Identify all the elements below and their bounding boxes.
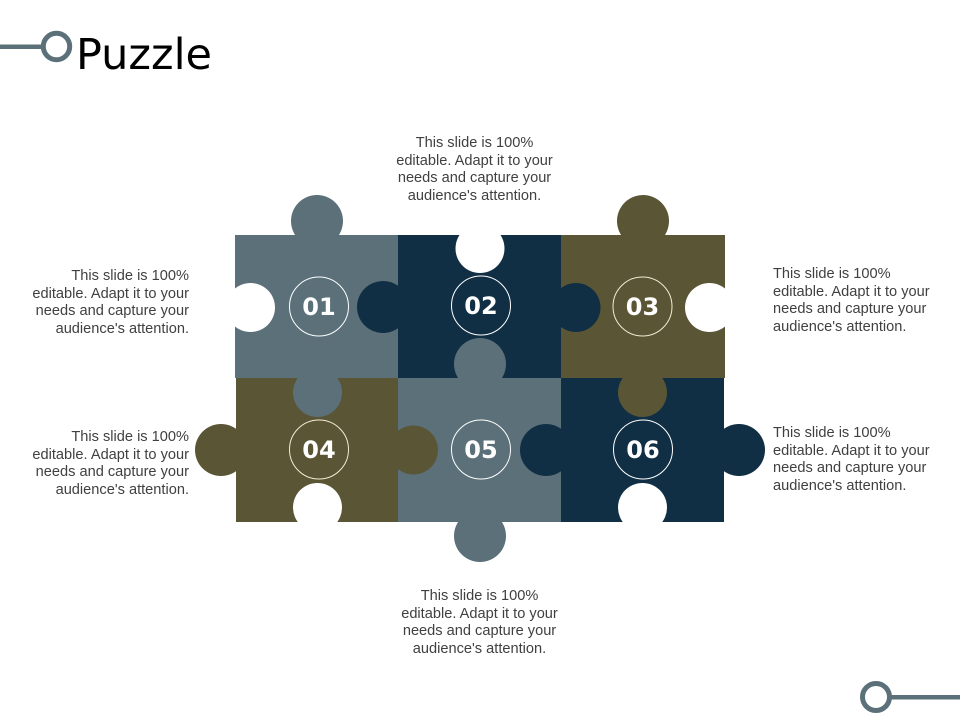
piece 04 right tab bbox=[389, 426, 438, 474]
puzzle piece 01 bbox=[226, 195, 398, 417]
text block: right upper: needs and capture your bbox=[773, 301, 926, 317]
puzzle piece 06 bbox=[561, 378, 765, 532]
text block: left lower: editable. Adapt it to your bbox=[32, 447, 189, 463]
text block: top: needs and capture your bbox=[398, 170, 551, 186]
title: Puzzle bbox=[76, 30, 212, 80]
text block: left lower: This slide is 100% bbox=[71, 429, 189, 445]
number badge 02: 02 bbox=[464, 292, 498, 320]
number badge 01 bbox=[290, 277, 348, 336]
piece 06 left tab bbox=[520, 424, 572, 476]
number badge 03: 03 bbox=[626, 293, 659, 321]
text block: right lower: needs and capture your bbox=[773, 460, 926, 476]
text block: bottom: editable. Adapt it to your bbox=[401, 606, 558, 622]
text block: top: This slide is 100% bbox=[416, 135, 533, 151]
text block: bottom: audience's attention. bbox=[413, 641, 546, 657]
icon: header connector ring bbox=[0, 33, 70, 60]
number badge 04: 04 bbox=[302, 436, 336, 464]
text block: left upper: This slide is 100% bbox=[71, 268, 189, 284]
puzzle piece 03 bbox=[561, 195, 734, 417]
text block: right upper: audience's attention. bbox=[773, 319, 906, 335]
text block: left upper: audience's attention. bbox=[56, 321, 189, 337]
text block: right lower: editable. Adapt it to your bbox=[773, 443, 930, 459]
text block: left upper: editable. Adapt it to your bbox=[32, 286, 189, 302]
text block: left upper bbox=[32, 268, 189, 337]
number badge 01: 01 bbox=[302, 293, 336, 321]
text block: right lower: This slide is 100% bbox=[773, 425, 891, 441]
puzzle piece 04 bbox=[195, 378, 398, 532]
text block: left lower: audience's attention. bbox=[56, 482, 189, 498]
puzzle piece 05 bbox=[398, 338, 561, 562]
number badge 05 bbox=[452, 420, 510, 479]
text block: top bbox=[396, 135, 553, 204]
text block: top: editable. Adapt it to your bbox=[396, 153, 553, 169]
text block: right lower: audience's attention. bbox=[773, 478, 906, 494]
text block: left upper: needs and capture your bbox=[36, 303, 189, 319]
text block: right lower bbox=[773, 425, 930, 494]
number badge 05: 05 bbox=[464, 436, 498, 464]
text block: right upper: editable. Adapt it to your bbox=[773, 284, 930, 300]
text block: top: audience's attention. bbox=[408, 188, 541, 204]
text block: bottom: needs and capture your bbox=[403, 623, 556, 639]
puzzle piece 02 bbox=[357, 224, 600, 378]
text block: left lower bbox=[32, 429, 189, 498]
text block: right upper bbox=[773, 266, 930, 335]
icon: footer connector ring bbox=[862, 684, 960, 710]
number badge 03 bbox=[613, 277, 672, 336]
number badge 02 bbox=[452, 276, 510, 335]
number badge 06 bbox=[614, 420, 672, 479]
text block: bottom bbox=[401, 588, 558, 657]
number badge 06: 06 bbox=[626, 436, 660, 464]
number badge 04 bbox=[290, 420, 348, 479]
text block: left lower: needs and capture your bbox=[36, 464, 189, 480]
text block: bottom: This slide is 100% bbox=[421, 588, 538, 604]
text block: right upper: This slide is 100% bbox=[773, 266, 891, 282]
